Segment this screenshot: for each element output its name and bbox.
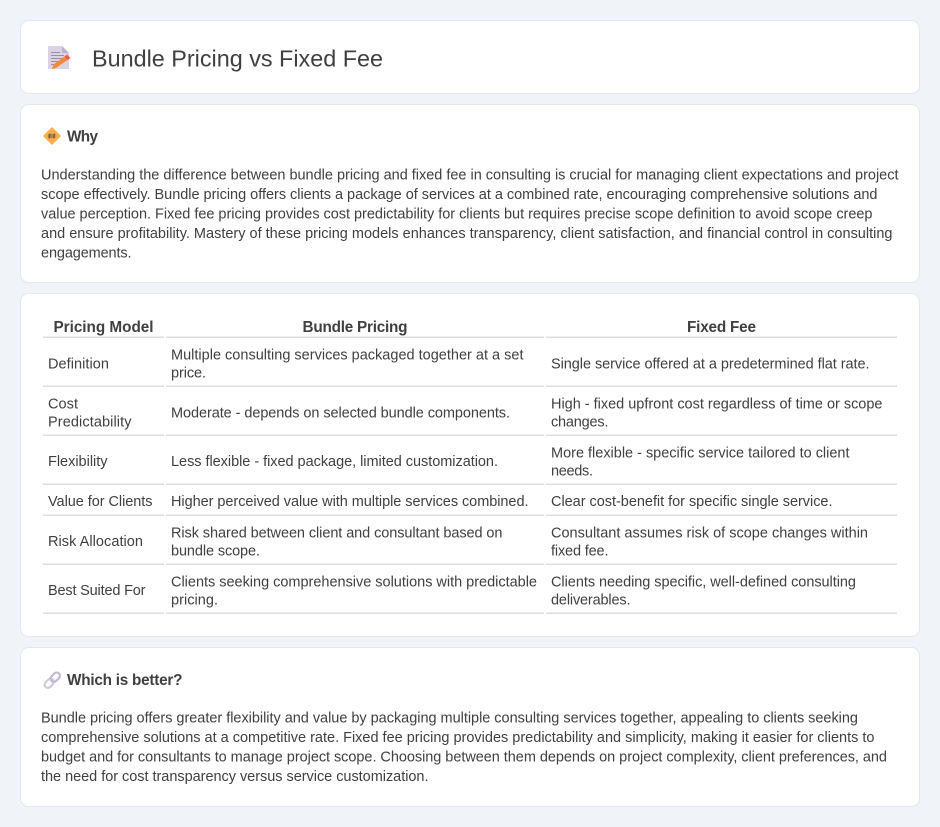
table header row: Bundle Pricing [302, 319, 408, 336]
table row: risk allocation [43, 525, 897, 565]
text block: why paragraph: engagements. [41, 245, 132, 261]
table row: risk allocation: bundle scope. [171, 543, 260, 559]
table header row: Pricing Model [54, 319, 154, 336]
text block: why paragraph: Understanding the difference between bundle pricing and fixed fee in consulting is crucial for managing client expectations and project [41, 167, 898, 183]
table row: value for clients [43, 494, 897, 516]
table row: definition: Definition [48, 356, 109, 372]
table row: definition: Single service offered at a predetermined flat rate. [551, 356, 870, 372]
table header row [43, 319, 897, 338]
table row: cost predictability: changes. [551, 414, 608, 430]
table row: flexibility: needs. [551, 463, 593, 479]
table row: value for clients: Clear cost-benefit for specific single service. [551, 494, 832, 510]
icon: diamond warning sign [44, 128, 60, 144]
table row: definition: Multiple consulting services packaged together at a set [171, 347, 524, 363]
table row: flexibility: Flexibility [48, 454, 108, 470]
table row: best suited for: Clients seeking comprehensive solutions with predictable [171, 574, 537, 590]
table row: flexibility [43, 445, 897, 485]
table row: risk allocation: Risk Allocation [48, 534, 143, 550]
table row: flexibility: Less flexible - fixed package, limited customization. [171, 454, 498, 470]
text block: which is better paragraph: comprehensive solutions at a competitive rate. Fixed fee pricing provides predictability and simplicity, making it easier for clients to [41, 730, 874, 746]
table row: value for clients: Value for Clients [48, 494, 152, 510]
panel: page header [20, 20, 920, 94]
title: Bundle Pricing vs Fixed Fee [92, 46, 383, 72]
text block: why paragraph: value perception. Fixed fee pricing provides cost predictability for clients but requires precise scope definition to avoid scope creep [41, 206, 872, 222]
panel: which is better [20, 648, 920, 806]
icon: chain link [43, 671, 61, 689]
table row: risk allocation: fixed fee. [551, 543, 608, 559]
table header row: Fixed Fee [687, 319, 756, 336]
heading: why: Why [67, 129, 98, 146]
panel: why [20, 104, 920, 282]
table row: best suited for [43, 574, 897, 614]
text block: why paragraph: and ensure profitability. Mastery of these pricing models enhances transparency, client satisfaction, and financial control in consulting [41, 226, 892, 242]
table row: best suited for: pricing. [171, 592, 218, 608]
table row: cost predictability: High - fixed upfront cost regardless of time or scope [551, 396, 882, 412]
panel: comparison table [20, 294, 920, 636]
table row: flexibility: More flexible - specific service tailored to client [551, 445, 850, 461]
table row: definition: price. [171, 365, 206, 381]
table row: cost predictability [43, 396, 897, 436]
table row: best suited for: deliverables. [551, 592, 630, 608]
text block: why paragraph: scope effectively. Bundle pricing offers clients a package of services at a combined rate, encouraging comprehensive solutions and [41, 187, 878, 203]
table row: risk allocation: Consultant assumes risk of scope changes within [551, 525, 868, 541]
text block: which is better paragraph [41, 710, 887, 785]
text block: which is better paragraph: budget and for consultants to manage project scope. Choosing between them depends on project complexity, client preferences, and [41, 749, 887, 765]
text block: which is better paragraph: Bundle pricing offers greater flexibility and value by packaging multiple consulting services together, appealing to clients seeking [41, 710, 858, 726]
table row: cost predictability: Predictability [48, 414, 132, 430]
table row: value for clients: Higher perceived value with multiple services combined. [171, 494, 528, 510]
heading: which is better: Which is better? [67, 672, 182, 689]
table row: risk allocation: Risk shared between client and consultant based on [171, 525, 502, 541]
text block: why paragraph [41, 167, 898, 261]
table row: definition [43, 347, 897, 387]
table row: cost predictability: Cost [48, 396, 78, 412]
table row: best suited for: Clients needing specific, well-defined consulting [551, 574, 856, 590]
table row: cost predictability: Moderate - depends on selected bundle components. [171, 405, 510, 421]
text block: which is better paragraph: the need for cost transparency versus service customization. [41, 769, 428, 785]
table row: best suited for: Best Suited For [48, 583, 146, 599]
icon: memo with pencil [48, 46, 70, 69]
